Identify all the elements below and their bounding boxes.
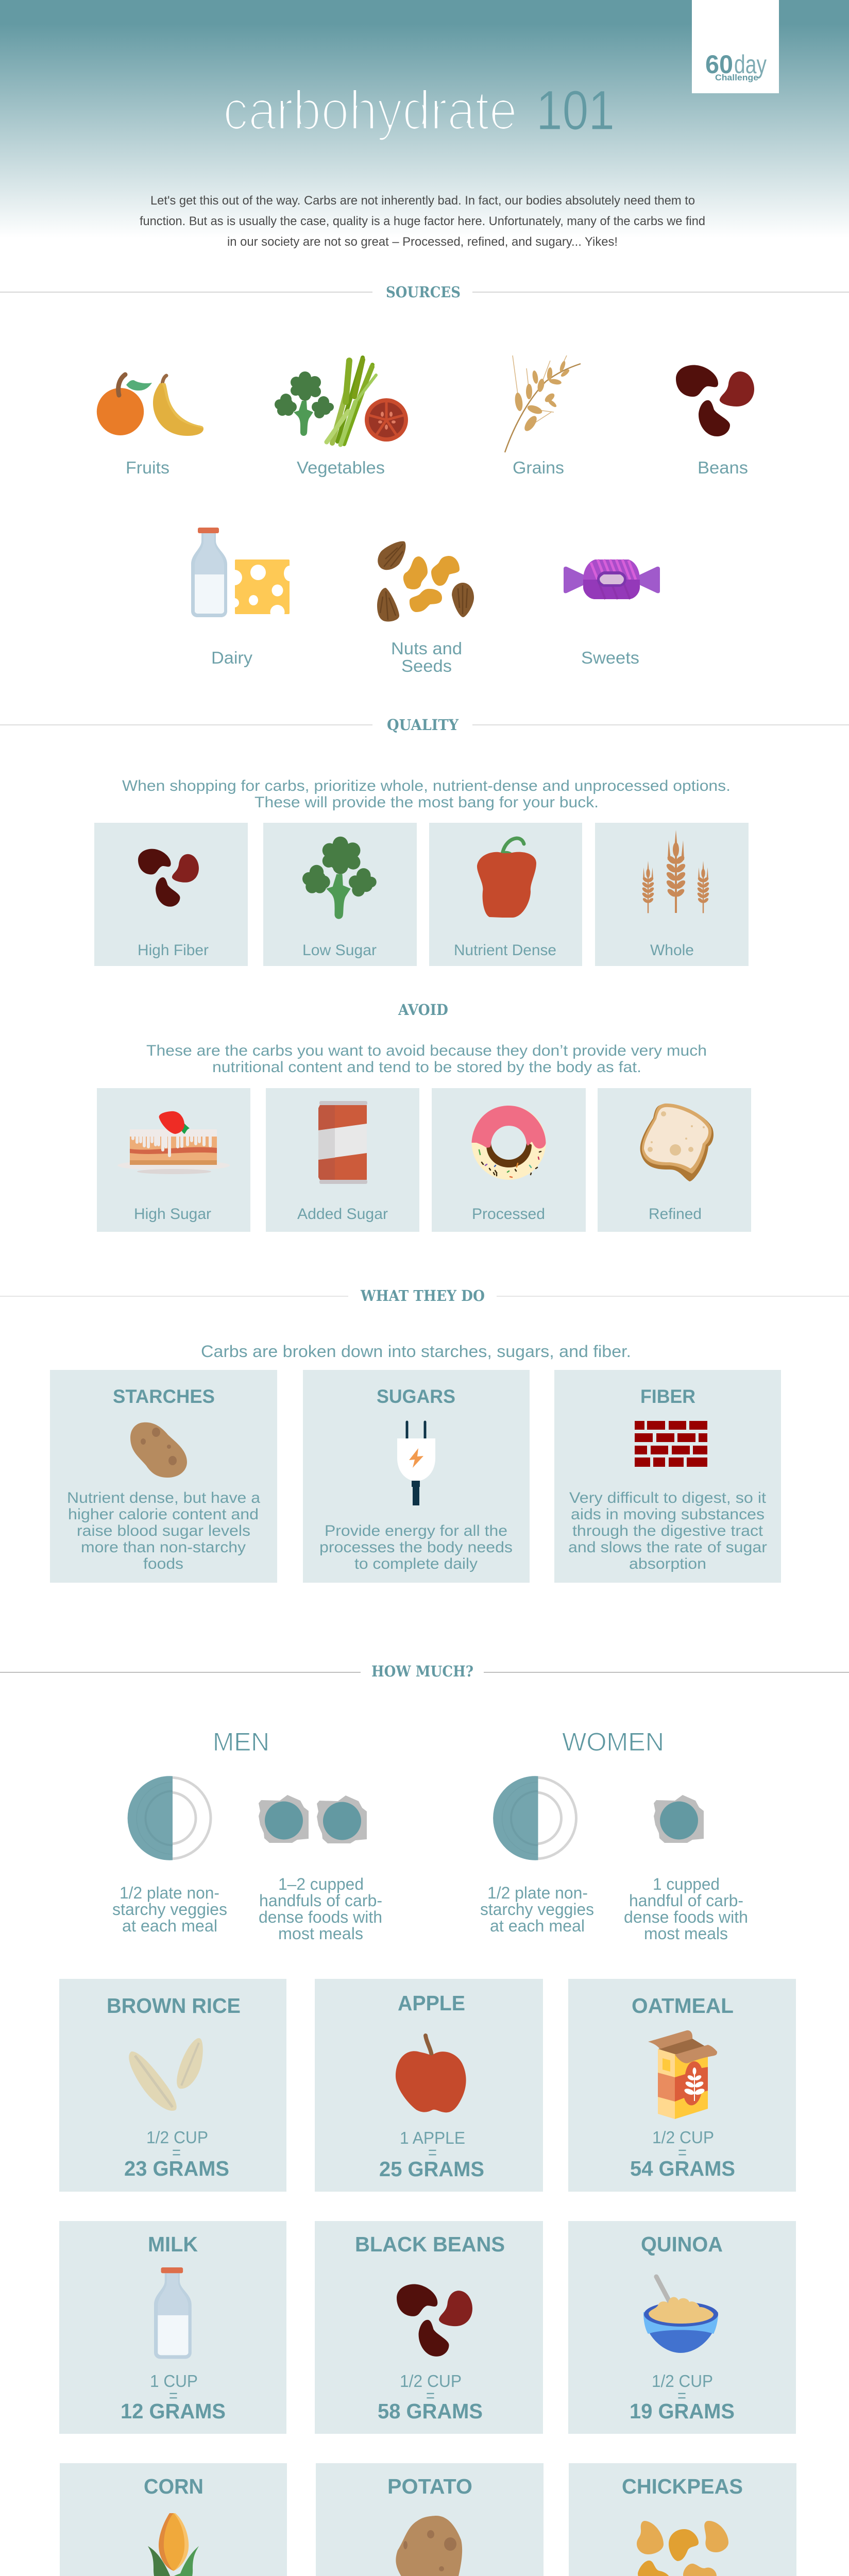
icon: chickpeas <box>637 2521 728 2576</box>
text: amount: 58 GRAMS <box>378 2399 483 2423</box>
text: handful advice: most meals <box>644 1924 728 1943</box>
heading: how much: HOW MUCH? <box>371 1663 473 1680</box>
heading: women: WOMEN <box>562 1727 664 1756</box>
text: plate advice: starchy veggies <box>112 1900 227 1919</box>
icon: half plate <box>493 1776 576 1860</box>
title: carbohydrate <box>223 79 517 141</box>
title: chickpeas: CHICKPEAS <box>622 2475 743 2498</box>
icon: bell pepper <box>477 838 536 918</box>
text: sugars description <box>319 1522 513 1572</box>
text: amount: = <box>428 2143 437 2162</box>
text: fiber description: and slows the rate of sugar <box>568 1539 767 1556</box>
text: quality intro <box>122 777 731 811</box>
text: starches description: higher calorie content and <box>68 1506 259 1523</box>
text: amount: 25 GRAMS <box>379 2157 484 2181</box>
text: handful advice <box>259 1875 382 1943</box>
title: black beans: BLACK BEANS <box>355 2232 505 2256</box>
icon: cereal box <box>648 2030 717 2119</box>
text: avoid intro <box>146 1042 707 1076</box>
title: 101 <box>536 79 615 141</box>
icon: beans <box>397 2284 472 2357</box>
text: starches description <box>67 1489 260 1572</box>
title: sugars: SUGARS <box>377 1386 455 1407</box>
card: black beans <box>315 2221 543 2434</box>
text: amount: = <box>426 2386 435 2405</box>
text: amount: 1 APPLE <box>400 2128 465 2147</box>
title: milk: MILK <box>148 2232 198 2256</box>
card: sugars <box>303 1370 530 1583</box>
panel: women <box>480 1727 748 1943</box>
card: potato <box>316 2463 544 2576</box>
icon: cake <box>117 1111 230 1174</box>
text: starches description: foods <box>143 1555 183 1572</box>
intro paragraph: function. But as is usually the case, quality is a huge factor here. Unfortunately, many of the carbs we find <box>140 214 705 228</box>
icon: quinoa bowl <box>643 2277 718 2353</box>
panel: men <box>112 1727 382 1943</box>
heading: avoid: AVOID <box>398 1001 448 1019</box>
icon: soda can <box>318 1101 367 1184</box>
label: grains: Grains <box>513 458 564 477</box>
text: avoid intro: These are the carbs you want to avoid because they don’t provide very much <box>146 1042 707 1059</box>
badge: 60 day challenge: 60 <box>705 50 733 79</box>
text: plate advice <box>112 1884 227 1935</box>
text: handful advice: 1 cupped <box>653 1875 720 1893</box>
card: milk <box>59 2221 286 2434</box>
icon: nuts and seeds <box>377 541 474 621</box>
card: refined <box>598 1088 751 1232</box>
title: fiber: FIBER <box>640 1386 695 1407</box>
icon: grains <box>505 355 581 452</box>
icon: beans <box>676 365 754 436</box>
text: amount: 54 GRAMS <box>630 2157 735 2180</box>
text: plate advice: at each meal <box>122 1917 217 1935</box>
text: starches description: more than non-starchy <box>81 1539 246 1556</box>
icon: bread <box>640 1104 714 1181</box>
title: apple: APPLE <box>398 1991 465 2015</box>
card: chickpeas <box>569 2463 796 2576</box>
text: handful advice <box>624 1875 748 1943</box>
text: fiber description: aids in moving substances <box>571 1506 765 1523</box>
text: plate advice: starchy veggies <box>480 1900 594 1919</box>
icon: donut <box>472 1106 546 1180</box>
heading: quality: QUALITY <box>387 716 459 734</box>
text: amount <box>379 2128 484 2181</box>
intro paragraph: in our society are not so great – Processed, refined, and sugary... Yikes! <box>227 235 618 249</box>
label: whole: Whole <box>650 942 694 959</box>
card: oatmeal <box>568 1979 796 2192</box>
panel: sources row two <box>191 528 660 675</box>
text: carbs breakdown: Carbs are broken down into starches, sugars, and fiber. <box>201 1342 631 1361</box>
icon: fruits <box>97 375 203 436</box>
text: amount: 1/2 CUP <box>652 2371 713 2391</box>
text: amount: = <box>677 2386 686 2405</box>
text: amount: = <box>169 2386 178 2405</box>
icon: broccoli <box>302 837 377 919</box>
text: sugars description: Provide energy for all the <box>325 1522 507 1539</box>
icon: wheat <box>641 830 710 913</box>
title: starches: STARCHES <box>113 1386 215 1407</box>
badge: 60 day challenge: Challenge <box>715 73 758 82</box>
intro paragraph <box>140 194 705 249</box>
card: nutrient dense <box>429 823 582 966</box>
badge: 60 day challenge: day <box>734 50 767 79</box>
icon: dairy <box>191 528 295 619</box>
icon: apple <box>396 2036 466 2112</box>
text: amount: 23 GRAMS <box>124 2157 229 2180</box>
text: handful advice: dense foods with <box>624 1908 748 1926</box>
text: amount: 1 CUP <box>150 2371 198 2391</box>
card: processed <box>432 1088 586 1232</box>
title: quinoa: QUINOA <box>641 2232 723 2256</box>
text: avoid intro: nutritional content and tend to be stored by the body as fat. <box>212 1059 641 1076</box>
card: quinoa <box>568 2221 796 2434</box>
icon: bricks <box>635 1421 707 1467</box>
label: vegetables: Vegetables <box>297 458 385 477</box>
text: amount <box>124 2128 229 2180</box>
text: sugars description: processes the body needs <box>319 1539 513 1556</box>
text: amount <box>630 2371 735 2423</box>
label: refined: Refined <box>649 1206 702 1223</box>
text: amount: = <box>678 2143 687 2162</box>
text: handful advice: 1–2 cupped <box>278 1875 364 1893</box>
icon: sweets <box>564 560 660 599</box>
label: beans: Beans <box>698 458 748 477</box>
card: corn <box>60 2463 287 2576</box>
label: added sugar: Added Sugar <box>297 1206 388 1223</box>
text: handful advice: handfuls of carb- <box>259 1891 382 1910</box>
text: plate advice: 1/2 plate non- <box>120 1884 219 1902</box>
card: high fiber <box>94 823 248 966</box>
text: sugars description: to complete daily <box>354 1555 478 1572</box>
text: amount: 1/2 CUP <box>652 2128 714 2147</box>
icon: vegetables <box>275 358 408 445</box>
icon: half plate <box>128 1776 211 1860</box>
text: plate advice: 1/2 plate non- <box>487 1884 588 1902</box>
icon: two handfuls <box>259 1795 367 1843</box>
text: fiber description: absorption <box>629 1555 706 1572</box>
text: plate advice: at each meal <box>490 1917 585 1935</box>
panel: sources row one <box>97 355 754 477</box>
icon: milk bottle <box>154 2267 192 2359</box>
badge: 60 day challenge <box>692 0 779 93</box>
text: starches description: Nutrient dense, but have a <box>67 1489 260 1506</box>
heading: what they do: WHAT THEY DO <box>360 1287 485 1304</box>
icon: corn <box>148 2513 199 2576</box>
label: processed: Processed <box>472 1206 545 1223</box>
card: whole <box>595 823 749 966</box>
text: amount: = <box>172 2143 181 2162</box>
label: dairy: Dairy <box>211 648 253 667</box>
label: nutrient dense: Nutrient Dense <box>454 942 556 959</box>
title: brown rice: BROWN RICE <box>107 1994 241 2018</box>
text: handful advice: dense foods with <box>259 1908 382 1926</box>
text: fiber description: Very difficult to digest, so it <box>569 1489 767 1506</box>
label: nuts and seeds: Nuts and <box>391 639 462 658</box>
card: apple <box>315 1979 543 2192</box>
card: brown rice <box>59 1979 286 2192</box>
text: amount: 12 GRAMS <box>121 2399 226 2423</box>
icon: plug <box>397 1422 435 1505</box>
title: corn: CORN <box>144 2475 203 2498</box>
text: amount: 19 GRAMS <box>630 2399 735 2423</box>
icon: potato <box>396 2516 462 2576</box>
text: amount <box>378 2371 483 2423</box>
label: fruits: Fruits <box>126 458 169 477</box>
label: nuts and seeds: Seeds <box>401 656 452 675</box>
intro paragraph: Let's get this out of the way. Carbs are not inherently bad. In fact, our bodies absolutely need them to <box>150 194 695 208</box>
text: amount <box>630 2128 735 2180</box>
label: low sugar: Low Sugar <box>302 942 377 959</box>
text: fiber description <box>568 1489 767 1572</box>
card: low sugar <box>263 823 417 966</box>
heading: men: MEN <box>213 1727 269 1756</box>
icon: one handful <box>654 1795 704 1843</box>
text: amount: 1/2 CUP <box>400 2371 462 2391</box>
title: oatmeal: OATMEAL <box>632 1994 734 2018</box>
text: amount: 1/2 CUP <box>146 2128 208 2147</box>
icon: rice grains <box>129 2038 203 2111</box>
label: high sugar: High Sugar <box>134 1206 211 1223</box>
text: plate advice <box>480 1884 594 1935</box>
card: added sugar <box>266 1088 419 1232</box>
label: high fiber: High Fiber <box>138 942 209 959</box>
text: handful advice: handful of carb- <box>629 1891 743 1910</box>
text: amount <box>121 2371 226 2423</box>
label: nuts and seeds <box>391 639 462 675</box>
header background gradient <box>0 0 849 238</box>
text: starches description: raise blood sugar levels <box>77 1522 250 1539</box>
label: sweets: Sweets <box>581 648 639 667</box>
card: fiber <box>554 1370 781 1583</box>
card: high sugar <box>97 1088 250 1232</box>
heading: sources: SOURCES <box>386 283 461 301</box>
text: handful advice: most meals <box>278 1924 363 1943</box>
text: quality intro: When shopping for carbs, prioritize whole, nutrient-dense and unprocessed options. <box>122 777 731 794</box>
text: fiber description: through the digestive tract <box>572 1522 763 1539</box>
text: quality intro: These will provide the most bang for your buck. <box>254 794 599 811</box>
icon: potato <box>130 1422 187 1478</box>
title: potato: POTATO <box>387 2475 472 2498</box>
card: starches <box>50 1370 277 1583</box>
icon: beans <box>138 849 199 907</box>
